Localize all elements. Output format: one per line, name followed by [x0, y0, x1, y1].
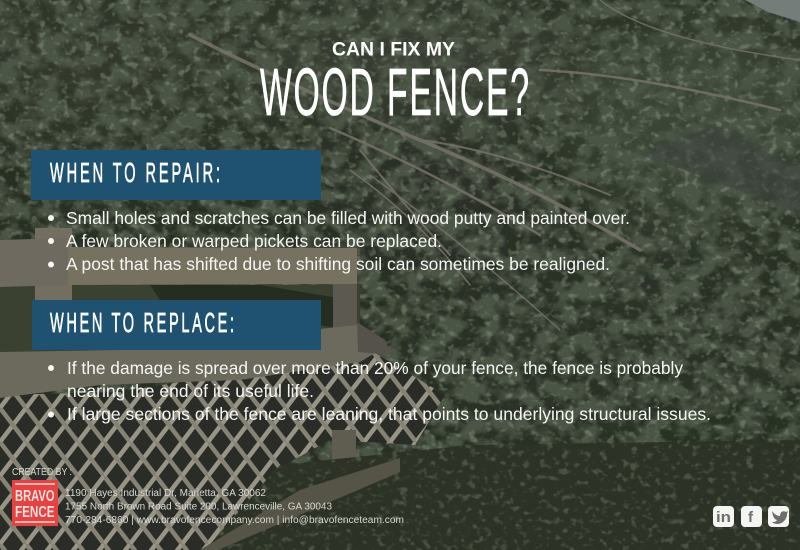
title: [260, 40, 529, 130]
branches: [190, 0, 800, 330]
repair bullet list: A post that has shifted due to shifting soil can sometimes be realigned.: [66, 254, 610, 274]
addresses and contact: 770-284-6860 | www.bravofencecompany.com | info@bravofenceteam.com: [65, 515, 404, 526]
logo: Bravo Fence: FENCE: [15, 502, 55, 520]
logo: Bravo Fence: BRAVO: [15, 486, 55, 504]
replace bullet list: nearing the end of its useful life.: [67, 381, 314, 401]
replace bullet list: If large sections of the fence are leaning, that points to underlying structural issues.: [67, 404, 711, 424]
heading bar: repair: [31, 150, 321, 200]
grass bottom: [205, 440, 800, 550]
repair bullet list: [48, 208, 630, 274]
replace bullet list: If the damage is spread over more than 20% of your fence, the fence is probably: [67, 358, 683, 378]
icon: linkedin: in: [716, 509, 731, 526]
created by label: CREATED BY :: [12, 467, 72, 478]
sky corner: [745, 0, 800, 22]
heading bar: replace: WHEN TO REPLACE:: [50, 307, 234, 338]
repair bullet list: A few broken or warped pickets can be replaced.: [66, 231, 442, 251]
repair bullet list: Small holes and scratches can be filled with wood putty and painted over.: [66, 208, 630, 228]
grass left: [0, 285, 360, 375]
heading bar: repair: WHEN TO REPAIR:: [50, 157, 220, 188]
social icons: [713, 506, 789, 527]
icon: facebook: f: [748, 509, 754, 526]
rails and posts: [35, 228, 72, 302]
panel: when to repair: [31, 150, 630, 274]
icon: twitter: [768, 506, 789, 527]
footer: company credit: [12, 467, 404, 526]
addresses and contact: 1190 Hayes Industrial Dr, Marietta, GA 30062: [65, 488, 266, 499]
addresses and contact: [65, 488, 404, 526]
lattice: [0, 350, 470, 550]
panel: when to replace: [32, 300, 711, 424]
title line 2: WOOD FENCE?: [260, 56, 529, 130]
heading bar: replace: [32, 300, 321, 350]
logo: Bravo Fence: [12, 480, 58, 526]
title line 1: CAN I FIX MY: [332, 40, 455, 60]
replace bullet list: [48, 358, 711, 424]
addresses and contact: 1755 North Brown Road Suite 200, Lawrenceville, GA 30043: [65, 502, 332, 512]
